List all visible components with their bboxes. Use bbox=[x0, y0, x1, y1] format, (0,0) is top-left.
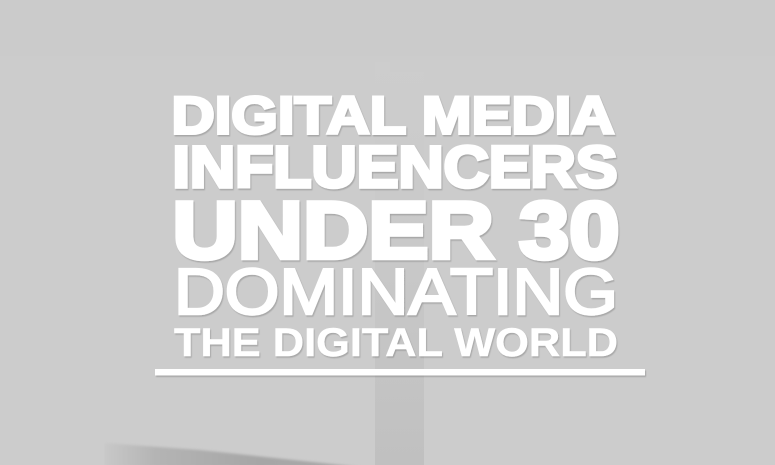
title line: Under 30: UNDER 30 bbox=[172, 186, 620, 276]
title line: The Digital World: THE DIGITAL WORLD bbox=[174, 321, 618, 365]
background: floor shadow wedge bbox=[105, 443, 360, 465]
title line: Influencers: INFLUENCERS bbox=[172, 135, 618, 200]
title line: Dominating: DOMINATING bbox=[174, 255, 618, 328]
background: upper band bbox=[0, 0, 775, 56]
title underline rule bbox=[155, 369, 645, 376]
title bbox=[155, 86, 645, 376]
background: vertical column bbox=[375, 62, 424, 465]
title line: Digital Media: DIGITAL MEDIA bbox=[172, 86, 614, 146]
